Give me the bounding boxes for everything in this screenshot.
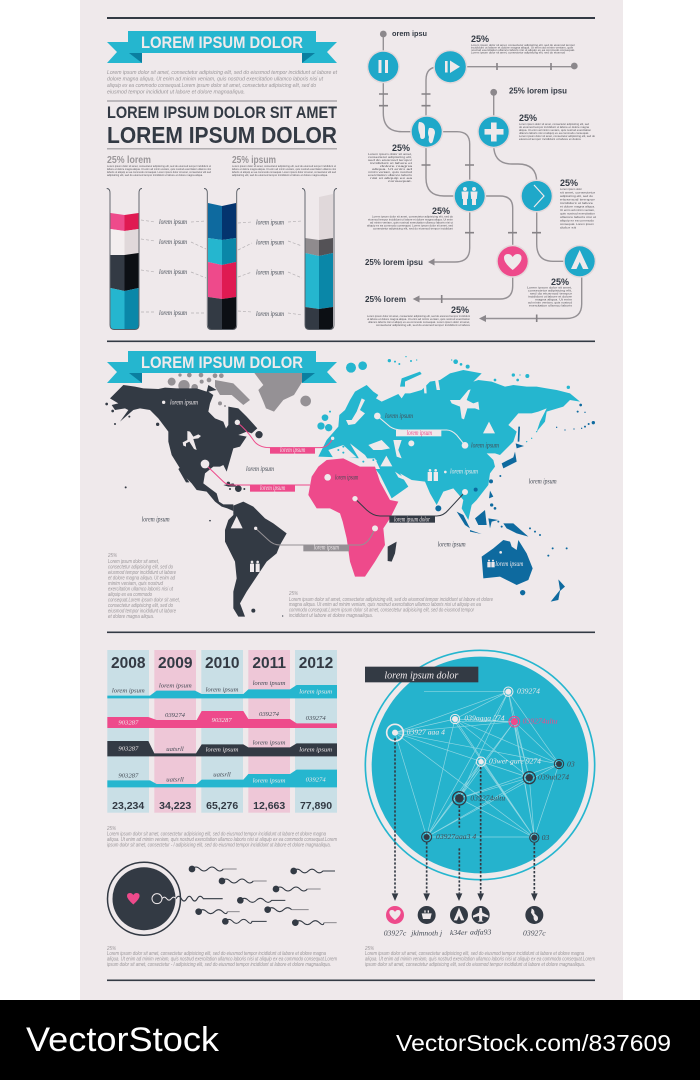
flow labels and text blocks: incididunt ut labore et xyxy=(370,161,412,165)
table text block xyxy=(106,826,337,848)
map labels: lorem ipsum xyxy=(142,516,170,524)
flow labels and text blocks: 25% lorem ipsu xyxy=(509,86,567,95)
dashed arrows xyxy=(392,738,538,901)
stepped bands: lorem ipsum xyxy=(206,686,239,693)
map text block left: exercitation ullamco laboris nisi ut xyxy=(108,586,174,592)
flow labels and text blocks: aliquip ex ea commodo consequat. Lorem ipsum dolor sit amet, sed xyxy=(367,224,453,228)
tube leader lines and labels: lorem ipsum xyxy=(256,268,284,276)
flow labels and text blocks: aliqua. Ut enim ad xyxy=(372,167,413,171)
map label bars: lorem ipsum dolor xyxy=(394,515,430,523)
stepped bands: 039274 xyxy=(306,715,326,722)
stepped bands: 903287 xyxy=(118,773,139,780)
egg text block: 25% xyxy=(106,946,116,952)
main headline xyxy=(107,100,337,150)
year headers: 2009 xyxy=(158,655,193,672)
map label bars: lorem ipsum xyxy=(314,544,339,552)
egg text block: aliqua. Ut enim ad minim veniam, quis nostrud exercitation ullamco laboris nisi ut aliquip ex ea commodo consequat.Lorem xyxy=(107,956,337,962)
map text block left: consectetur adipisicing elit, sed do xyxy=(108,564,173,570)
map text block left: aliquip ex ea commodo xyxy=(108,592,152,598)
legend icons xyxy=(386,906,543,924)
tube leader lines and labels: lorem ipsum xyxy=(159,217,187,226)
network labels: 039274ultu xyxy=(470,793,505,802)
table text block: 25% xyxy=(106,826,116,832)
flow labels and text blocks: Lorem ipsum dolor sit amet, consectetur adipisicing elit, sed do eiusmod tempor incididunt xyxy=(367,314,470,318)
flow diagram connectors xyxy=(379,31,582,322)
egg text block: Lorem ipsum dolor sit amet, consectetur adipisicing elit, sed do eiusmod tempor incididunt ut labore et dolore magna xyxy=(107,951,326,957)
map labels: lorem ipsum xyxy=(438,540,466,548)
madagascar xyxy=(388,542,397,562)
stepped bands: 903287 xyxy=(212,717,232,724)
network labels: 03927 aaa 4 xyxy=(407,727,445,736)
stepped bands: 903287 xyxy=(118,745,139,752)
map text block left: et dolore magna aliqua. xyxy=(108,614,154,620)
map label bars: lorem ipsum xyxy=(280,446,305,454)
text column: 25% ipsum: adipisicing elit, sed do eiusmod tempor incididunt ut labore et dolore magna aliqua. xyxy=(232,173,328,177)
flow labels and text blocks: consectetur adipisicing elit, xyxy=(368,155,412,159)
greenland and arctic islands xyxy=(168,372,311,412)
tube chart 2 xyxy=(204,188,240,330)
network title bar xyxy=(365,667,478,682)
year headers: 2008 xyxy=(111,655,146,672)
flow labels and text blocks: Lorem ipsum dolor sit amet, xyxy=(368,152,412,156)
tube chart 1 xyxy=(107,188,142,330)
flow labels and text blocks: Lorem ipsum dolor sit amet, consectetur adipisicing elit, sed xyxy=(519,122,589,126)
intro paragraph xyxy=(107,70,337,96)
flow labels and text blocks: Lorem ipsum dolor sit amet, consectetur adipisicing elit, sed do xyxy=(372,214,453,218)
flow labels and text blocks: incididunt ut labore et dolore xyxy=(528,294,572,298)
table text block: ipsum dolor sit amet, consectetur - l adipisicing elit, sed do eiusmod tempor incididunt ut labore et dolore magnaaliqua. xyxy=(107,842,331,848)
tube leader lines and labels: lorem ipsum xyxy=(159,267,187,276)
map labels: lorem ipsum xyxy=(170,398,198,406)
stepped bands: lorem ipsum xyxy=(253,680,286,687)
network text block: aliqua. Ut enim ad minim veniam, quis nostrud exercitation ullamco laboris nisi ut aliquip ex ea commodo consequat.Lorem xyxy=(365,956,595,962)
stepped bands: uatsrll xyxy=(166,776,184,783)
network labels: 03wer gure 9274 xyxy=(489,757,541,766)
egg text block xyxy=(106,946,337,968)
intro paragraph: eiusmod tempor incididunt ut labore et dolore magnaaliqua. xyxy=(107,90,245,96)
flow labels and text blocks: 25% xyxy=(432,206,450,216)
flow labels and text blocks: Lorem ipsum dolor sit amet, consectetur adipisicing elit, sed do xyxy=(519,134,595,138)
north america xyxy=(105,385,283,617)
main headline: LOREM IPSUM DOLOR SIT AMET xyxy=(107,104,337,122)
text column: 25% ipsum: Lorem ipsum dolor sit amet, consectetur adipisicing elit, sed do eiusmod tempor incididunt ut xyxy=(232,164,336,168)
stepped bands: lorem ipsum xyxy=(206,747,239,754)
section rule xyxy=(107,340,595,342)
ribbon heading: map: LOREM IPSUM DOLOR xyxy=(141,353,303,372)
flow labels and text blocks: eiusmod tempor incididunt ut labore et dolore magna aliqua. Ut enim xyxy=(368,218,453,222)
map text block left: eiusmod tempor incididunt ut labore xyxy=(108,608,176,614)
bottom rule xyxy=(107,980,595,981)
world map xyxy=(105,356,595,617)
south america xyxy=(225,502,287,617)
tube leader lines and labels xyxy=(141,217,302,318)
egg xyxy=(108,862,180,935)
flow labels and text blocks: dolor sit xyxy=(560,226,576,230)
network text block: 25% xyxy=(364,946,374,952)
network text block: Lorem ipsum dolor sit amet, consectetur adipisicing elit, sed do eiusmod tempor incididunt ut labore et dolore magna xyxy=(365,951,584,957)
flow labels and text blocks: minim veniam, quis nostrud xyxy=(368,170,412,174)
tube leader lines and labels: lorem ipsum xyxy=(159,237,187,246)
flow labels and text blocks: incididunt ut labore xyxy=(560,201,593,205)
stepped bands: uatsrll xyxy=(213,771,231,778)
flow labels and text blocks: quis nostrud exercitation xyxy=(560,212,595,216)
map labels: lorem ipsum xyxy=(471,441,499,449)
network labels: 03 xyxy=(567,759,575,768)
stepped bands: lorem ipsum xyxy=(299,688,332,695)
map label bars: lorem ipsum xyxy=(260,484,285,492)
text column: 25% ipsum: laboris ut aliquip ex ea commodo consequat. Lorem ipsum dolor sit amet, consectetur elit sed xyxy=(232,170,336,174)
network text block: ipsum dolor sit amet, consectetur adipisicing elit, sed do eiusmod tempor incididunt ut labore et dolore magnaaliqua. xyxy=(365,962,585,968)
flow labels and text blocks: Lorem ipsum dolor sit amet, consectetur adipisicing elit, sed do eiusmod tempor xyxy=(471,43,575,47)
watermark footer xyxy=(0,1000,700,1080)
stepped bands: 039274 xyxy=(259,711,280,718)
flow labels and text blocks: 25% lorem xyxy=(365,295,406,304)
watermark footer: VectorStock.com/837609 xyxy=(396,1030,671,1056)
intro paragraph: aliquip ex ea commodo consequat.Lorem ipsum dolor sit amet, consectetur adipisicing elit, sed do xyxy=(107,83,316,89)
stepped bands: lorem ipsum xyxy=(299,747,332,754)
main headline: LOREM IPSUM DOLOR xyxy=(107,122,337,148)
network labels: 039274ultu xyxy=(523,717,558,726)
flow labels and text blocks: eiusmod tempor xyxy=(560,198,595,202)
flow labels and text blocks: do eiusmod tempor incididunt ut labore et dolore magna xyxy=(519,125,589,129)
flow labels and text blocks: Lorem ipsum dolor xyxy=(560,187,582,191)
year headers: 2012 xyxy=(299,655,333,672)
map text block left: Lorem ipsum dolor sit amet, xyxy=(108,559,159,565)
network title bar: lorem ipsum dolor xyxy=(384,671,459,682)
flow labels and text blocks: aliqua. Ut enim ad minim veniam, quis nostrud exercitation xyxy=(519,128,591,132)
flow labels and text blocks: ad minim veniam, quis nostrud exercitation ullamco laboris nisi ut xyxy=(370,220,453,224)
flow labels and text blocks: nostrud exercitation ullamco laboris nisi ut aliquip ex ea commodo consequat. xyxy=(471,48,575,52)
stepped bands: lorem ipsum xyxy=(253,777,286,784)
flow labels and text blocks: consectetur adipisicing elit, sed do eiusmod tempor incididunt ut labore xyxy=(376,323,470,327)
map dots xyxy=(162,401,502,554)
asia pacific and australia xyxy=(435,404,595,602)
flow labels and text blocks: adipisicing elit, sed do xyxy=(560,194,593,198)
flow labels and text blocks: exercitation ullamco laboris xyxy=(368,173,413,177)
network text block xyxy=(364,946,595,968)
flow labels and text blocks: ut labore et dolore magna aliqua. Ut enim ad minim veniam, quis nostrud exercitation xyxy=(367,317,470,321)
flow labels and text blocks: incididunt ut labore et dolore magna aliqua. Ut enim ad minim veniam, quis xyxy=(471,46,573,50)
watermark footer: VectorStock xyxy=(26,1021,220,1059)
node: people xyxy=(453,180,486,212)
table columns xyxy=(107,650,337,813)
flow labels and text blocks: consequat. Lorem ipsum xyxy=(560,222,595,226)
node: plus xyxy=(477,115,510,148)
flow labels and text blocks: eiusmod tempor incididunt ut labore et dolore xyxy=(519,137,581,141)
flow labels and text blocks: 25% xyxy=(471,34,489,44)
stepped bands: 903287 xyxy=(118,720,139,727)
map labels: lorem ipsum xyxy=(529,478,557,486)
stepped bands: 039274 xyxy=(306,777,326,784)
map labels: lorem ipsum xyxy=(450,467,478,475)
flow labels and text blocks: sit amet, consectetur xyxy=(560,190,595,194)
stepped bands: lorem ipsum xyxy=(159,683,192,690)
legend labels: 03927c xyxy=(523,928,546,937)
mediterranean dots xyxy=(337,446,374,463)
map text block right: commodo consequat.Lorem ipsum dolor sit amet, consectetur adipisicing elit, sed do eiusmod tempor xyxy=(289,608,474,614)
totals: 34,223 xyxy=(159,800,191,812)
tube leader lines and labels: lorem ipsum xyxy=(159,308,187,317)
map text block left: minim veniam, quis nostrud xyxy=(108,581,163,587)
ribbon heading: top: LOREM IPSUM DOLOR xyxy=(141,33,303,52)
map text block left: eiusmod tempor incididunt ut labore xyxy=(108,570,176,576)
text column: 25% ipsum: labore et dolore magna aliqua. Ut enim ad minim veniam, quis nostrud exercitation ullamco nisi xyxy=(232,167,336,171)
network labels: 039274 xyxy=(517,687,540,696)
node: play xyxy=(433,50,467,84)
totals: 23,234 xyxy=(112,800,144,812)
network links xyxy=(395,692,559,838)
inland seas xyxy=(328,380,440,481)
text column: 25% lorem: adipisicing elit, sed do eiusmod tempor incididunt ut labore et dolore magna aliqua. xyxy=(107,173,203,177)
flow labels and text blocks: 25% xyxy=(451,305,469,315)
flow labels and text blocks: sed do eiusmod tempor xyxy=(530,292,572,296)
map text block right: incididunt ut labore et dolore magnaaliqua. xyxy=(289,613,373,619)
flow labels and text blocks: 25% xyxy=(519,113,537,123)
map label bars xyxy=(250,429,441,552)
network labels: 03927aaa3 4 xyxy=(436,832,476,841)
node: tent xyxy=(563,245,596,278)
totals: 77,890 xyxy=(300,800,332,812)
totals xyxy=(112,800,332,812)
flow labels and text blocks: magna aliqua. Ut enim xyxy=(535,298,573,302)
intro paragraph: Lorem ipsum dolor sit amet, consectetur adipisicing elit, sed do eiusmod tempor incididunt ut labore et xyxy=(107,70,337,76)
map labels: lorem ipsum xyxy=(246,465,274,473)
node: heart xyxy=(496,245,529,278)
flow labels and text blocks xyxy=(365,29,596,327)
section rule xyxy=(107,632,595,633)
flow labels and text blocks: sed do eiusmod tempor xyxy=(368,158,412,162)
text column: 25% lorem: Lorem ipsum dolor sit amet, consectetur adipisicing elit, sed do eiusmod tempor incididunt ut xyxy=(107,164,211,168)
top rule xyxy=(107,17,595,19)
tube leader lines and labels: lorem ipsum xyxy=(256,238,284,246)
stepped bands: lorem ipsum xyxy=(253,739,286,746)
map text block left: et dolore magna aliqua. Ut enim ad xyxy=(108,576,175,582)
tube chart 3 xyxy=(302,188,337,330)
year headers xyxy=(111,655,333,672)
map labels: lorem ipsum xyxy=(495,560,523,568)
map text block left: 25% xyxy=(107,553,117,559)
legend labels: k34er xyxy=(450,928,467,937)
network labels: 039utl274 xyxy=(538,773,569,782)
map text block right: 25% xyxy=(288,591,298,597)
egg text block: ipsum dolor sit amet, consectetur - l adipisicing elit, sed do eiusmod tempor incididunt ut labore et dolore magnaaliqua. xyxy=(107,962,331,968)
ribbon heading: top xyxy=(107,31,337,63)
flow labels and text blocks: 25% xyxy=(392,143,410,153)
network circle xyxy=(365,650,595,937)
table text block: Lorem ipsum dolor sit amet, consectetur adipisicing elit, sed do eiusmod tempor incididunt ut labore et dolore magna xyxy=(107,832,326,838)
intro paragraph: dolore magna aliqua. Ut enim ad minim veniam, quis nostrud exercitation ullamco laboris nisi ut xyxy=(107,76,323,82)
flow labels and text blocks: ullamco laboris nisi ut aliquip ex ea commodo consequat. Lorem ipsum dolor sit amet, xyxy=(368,320,470,324)
tube leader lines and labels: lorem ipsum xyxy=(256,309,284,318)
totals: 12,663 xyxy=(253,800,285,812)
map icons xyxy=(183,389,495,572)
flow labels and text blocks: Ut enim ad minim veniam, xyxy=(560,208,595,212)
map label bars: lorem ipsum xyxy=(407,429,432,437)
network labels: 03 xyxy=(542,833,549,842)
text column: 25% lorem xyxy=(107,155,211,177)
text column: 25% lorem: labore et dolore magna aliqua. Ut enim ad minim veniam, quis nostrud exercitation ullamco nisi xyxy=(107,167,211,171)
text column: 25% lorem: 25% lorem xyxy=(107,155,151,166)
swimmers xyxy=(189,866,337,926)
map text block left: consectetur adipisicing elit, sed do xyxy=(108,603,173,609)
flow labels and text blocks: consectetur adipisicing elit, sed do eiusmod tempor incididunt xyxy=(373,226,453,230)
map text block right xyxy=(288,591,493,619)
map text block right: Lorem ipsum dolor sit amet, consectetur adipisicing elit, sed do eiusmod tempor incididunt ut labore et dolore xyxy=(289,597,493,603)
legend labels: 03927c xyxy=(384,928,407,937)
timeline table xyxy=(107,650,337,813)
stepped bands xyxy=(107,680,337,787)
flow labels and text blocks: exercitation ullamco laboris xyxy=(529,304,573,308)
network nodes xyxy=(387,687,564,842)
map connectors xyxy=(205,416,465,545)
flow labels and text blocks: 25% xyxy=(560,178,578,188)
eurasia xyxy=(317,356,580,520)
network labels xyxy=(407,687,575,842)
flow labels and text blocks: 25% lorem ipsu xyxy=(365,258,423,267)
flow labels and text blocks: 25% xyxy=(551,277,569,287)
year headers: 2010 xyxy=(205,655,239,672)
legend labels xyxy=(384,928,546,937)
tube leader lines and labels: lorem ipsum xyxy=(256,218,284,226)
lead swimmer xyxy=(152,894,223,904)
egg and swimmers illustration xyxy=(108,862,337,935)
flow labels and text blocks: Lorem ipsum dolor sit amet, xyxy=(527,286,572,290)
flow labels and text blocks: ullamco laboris nisi ut xyxy=(560,215,596,219)
year headers: 2011 xyxy=(252,655,286,672)
map labels: lorem ipsum xyxy=(385,412,413,420)
text column: 25% lorem: laboris ut aliquip ex ea commodo consequat. Lorem ipsum dolor sit amet, consectetur elit sed xyxy=(107,170,211,174)
network labels: 039agga 274 xyxy=(464,713,505,722)
flow labels and text blocks: consectetur adipisicing elit, xyxy=(528,288,572,292)
map text block right: magna aliqua. Ut enim ad minim veniam, quis nostrud exercitation ullamco laboris nisi ut aliquip ex ea xyxy=(289,602,481,608)
legend labels: adfa93 xyxy=(470,928,491,937)
flow labels and text blocks: dolore magna xyxy=(380,164,413,168)
stepped bands: 039274 xyxy=(165,712,186,719)
flow labels and text blocks: et dolore magna aliqua. xyxy=(560,204,595,208)
map text block left xyxy=(107,553,180,620)
text column: 25% ipsum: 25% ipsum xyxy=(232,155,276,166)
flow labels and text blocks: ullamco laboris nisi ut aliquip ex ea commodo consequat. xyxy=(519,131,589,135)
map labels: lorem ipsum xyxy=(335,473,358,481)
ribbon heading: map xyxy=(107,351,337,383)
flow labels and text blocks: nisi ut aliquip ex ea xyxy=(370,176,413,180)
flow labels and text blocks: aliquip ex ea commodo xyxy=(560,218,594,222)
node: footprints xyxy=(410,115,443,148)
map text block left: consequat.Lorem ipsum dolor sit amet, xyxy=(108,598,180,604)
legend labels: jklmnoth j xyxy=(410,928,442,937)
flow labels and text blocks: ad minim veniam, quis nostrud xyxy=(528,300,572,304)
africa xyxy=(308,458,398,577)
flow labels and text blocks: Lorem ipsum dolor sit amet, consectetur adipisicing elit, sed do eiusmod xyxy=(471,50,565,54)
background panel xyxy=(80,0,623,1000)
flow labels and text blocks: consequat. xyxy=(388,179,412,183)
text column: 25% ipsum xyxy=(232,155,336,177)
stepped bands: lorem ipsum xyxy=(112,687,145,694)
node: pause xyxy=(367,50,400,83)
totals: 65,276 xyxy=(206,800,238,812)
table text block: aliqua. Ut enim ad minim veniam, quis nostrud exercitation ullamco laboris nisi ut aliquip ex ea commodo consequat.Lorem xyxy=(107,837,337,843)
stepped bands: uatsrll xyxy=(166,746,184,753)
flow labels and text blocks: orem ipsu xyxy=(392,29,427,38)
node: chevron xyxy=(520,180,553,212)
map labels xyxy=(142,398,557,568)
